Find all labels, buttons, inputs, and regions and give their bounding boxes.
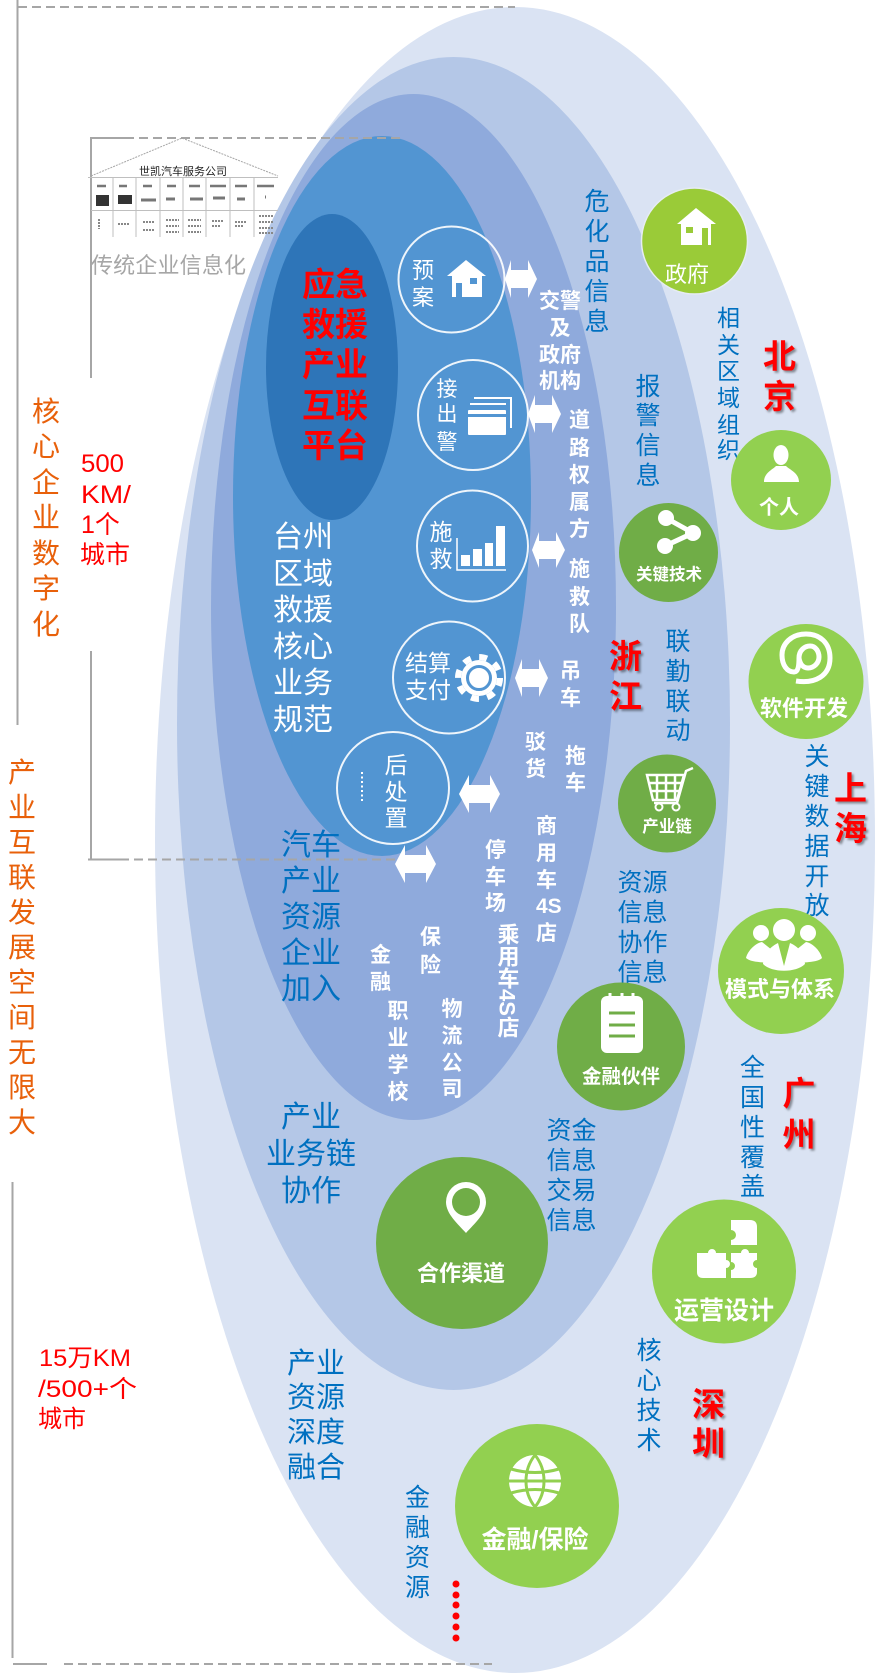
partner labels, white ring text: 方 [569,517,590,541]
badge: software development [748,624,864,739]
side title: industry internet development: 展 [8,932,36,963]
city: Shenzhen: 深 [692,1386,725,1423]
partner labels, white ring text: 乘用车4S店 [494,923,520,1038]
side title: industry internet development: 发 [8,897,36,928]
label: related regional organizations: 域 [717,385,740,411]
process step: after-care: 后 [384,752,408,778]
partner labels, white ring text: 货 [525,757,546,781]
process step: settlement and payment: 支付 [405,677,451,703]
badge: individual [731,430,831,530]
side title: core enterprise digitalization: 核 [32,396,60,427]
partner labels, white ring text: 交警 [539,289,581,313]
label: resource information collaboration: 信息 [617,959,668,987]
partner labels, white ring text: 业 [388,1027,408,1050]
core platform title: 平台 [302,427,368,464]
partner labels, white ring text: 校 [388,1080,408,1104]
partner labels, white ring text: 车 [560,687,581,710]
core platform title: 互联 [302,387,368,424]
label: nationwide coverage: 覆 [740,1144,765,1172]
badge: financial partner: 金融伙伴 [582,1065,660,1088]
label: automotive resource companies join: 资源 [281,901,341,934]
badge: financial partner [557,982,685,1110]
label: core technology: 技 [636,1397,662,1425]
badge: industry chain: 产业链 [642,816,692,836]
badge: operations design: 运营设计 [674,1297,774,1325]
label: resource information collaboration: 协作 [617,929,668,957]
core platform title: 应急 [302,266,368,303]
regional rescue core business specification: 区域 [273,558,333,591]
label: alarm information: 信 [635,432,661,460]
scale note: 500 km one city: 500 [81,450,124,478]
label: hazardous goods information: 信 [584,278,610,306]
badge: operations design [652,1200,796,1344]
scale note: 150000 km 500 cities [38,1345,137,1433]
city: Shanghai: 上 [834,770,867,807]
label: automotive resource companies join: 企业 [281,937,341,970]
process step: rescue: 施 [430,519,452,545]
partner labels, white ring text: 及 [550,317,570,340]
badge: government: 政府 [665,262,709,287]
regional rescue core business specification: 规范 [273,704,333,737]
label: related regional organizations: 织 [717,437,740,463]
badge: government [642,188,748,294]
process step: after-care [337,732,449,844]
label: core technology: 心 [636,1367,662,1395]
process step: rescue [417,490,528,602]
partner labels, white ring text: 拖 [565,745,586,768]
label: resource information collaboration: 资源 [617,869,668,897]
label: deep resource integration: 深度 [287,1416,345,1449]
partner labels, white ring text: 路 [569,437,590,460]
label: fund and transaction information: 资金 [546,1117,597,1145]
side title: core enterprise digitalization: 业 [32,502,60,533]
label: nationwide coverage: 国 [740,1084,765,1112]
bracket lines: outer, core and traditional scope [12,0,515,1664]
regional rescue core business specification: 业务 [273,667,333,700]
side title: core enterprise digitalization: 企 [32,467,60,498]
badge: model and system: 模式与体系 [725,977,835,1002]
label: deep resource integration: 资源 [287,1381,345,1414]
label: related regional organizations: 关 [717,332,740,358]
side title: core enterprise digitalization: 字 [32,573,60,604]
label: open key data: 关 [804,743,830,771]
side title: industry internet development: 无 [8,1037,36,1068]
label: deep resource integration: 融合 [287,1451,345,1484]
label: automotive resource companies join: 汽车 [281,829,341,862]
side title: industry internet development: 间 [8,1002,36,1033]
partner labels, white ring text: 融 [370,971,391,994]
label: financial resources: 融 [405,1514,430,1542]
process step: receive call: 出 [436,403,458,426]
label: open key data: 开 [804,863,830,891]
process step: receive call: 接 [436,378,458,401]
partner labels, white ring text: 车 [536,869,557,892]
partner labels, white ring text: 车 [565,772,586,795]
partner labels, white ring text: 店 [536,922,557,945]
side title: industry internet development: 业 [8,792,36,823]
label: open key data: 数 [804,803,830,831]
partner labels, white ring text: 机构 [539,370,581,393]
label: open key data: 放 [804,892,830,920]
label: hazardous goods information: 化 [584,218,610,246]
process step: rescue: 救 [430,546,452,572]
side title: industry internet development: 联 [8,862,36,893]
side title: industry internet development: 互 [8,827,36,858]
mini org chart: traditional enterprise [88,138,278,237]
partner labels, white ring text: 司 [442,1078,462,1101]
label: related regional organizations: 相 [717,305,740,331]
city: Shanghai: 海 [834,810,867,847]
partner labels, white ring text: 吊 [560,660,581,683]
label: related regional organizations: 组 [717,412,740,438]
side title: industry internet development: 大 [8,1107,36,1138]
label: linked service: 联 [665,628,691,656]
partner labels, white ring text: 公 [442,1052,462,1075]
partner labels, white ring text: 救 [569,586,590,609]
regional rescue core business specification: 核心 [273,631,333,664]
partner labels, white ring text: 商 [536,815,557,838]
partner labels, white ring text: 道 [569,409,590,432]
partner labels, white ring text: 金 [370,943,391,967]
badge: individual: 个人 [759,496,799,519]
scale note: 500 km one city: 城市 [80,541,130,569]
partner labels, white ring text: 职 [388,1000,408,1023]
scale note: 150000 km 500 cities: 城市 [38,1406,86,1433]
label: alarm information: 息 [635,462,661,490]
process step: settlement and payment [393,622,505,734]
double arrows between layers [395,260,565,883]
partner labels, white ring text: 施 [569,558,590,581]
side title: core enterprise digitalization: 数 [32,538,60,569]
badge: partner channel [376,1157,548,1329]
partner labels, white ring text: 用 [536,842,557,865]
scale note: 150000 km 500 cities: /500+个 [38,1376,137,1403]
process step: plan: 预 [412,258,434,283]
partner labels, white ring text: 属 [569,491,590,514]
badge: model and system [718,908,844,1034]
label: financial resources: 金 [405,1484,430,1512]
label: financial resources: 源 [405,1574,430,1602]
label: nationwide coverage: 全 [740,1054,765,1082]
label: automotive resource companies join: 加入 [281,973,341,1006]
label: nationwide coverage: 性 [740,1114,765,1142]
process step: settlement and payment: 结算 [405,650,451,676]
side title: industry internet development: 空 [8,967,36,998]
label: resource information collaboration: 信息 [617,899,668,927]
label: business chain collaboration: 产业 [281,1101,341,1134]
mini org chart: traditional enterprise: 世凯汽车服务公司 [139,164,227,178]
city: Zhejiang: 江 [609,678,642,715]
label: fund and transaction information: 信息 [546,1207,597,1235]
partner labels, white ring text: 驳 [525,731,546,754]
label: fund and transaction information: 信息 [546,1147,597,1175]
label: automotive resource companies join: 产业 [281,865,341,898]
partner labels, white ring text: 险 [420,953,441,977]
badge: key technology [619,503,718,602]
scale note: 150000 km 500 cities: 15万KM [39,1345,131,1372]
label: financial resources: 资 [405,1544,430,1572]
partner labels, white ring text [370,289,590,1104]
partner labels, white ring text: 场 [485,892,506,915]
regional rescue core business specification: 救援 [273,594,333,627]
side title: industry internet development: 限 [8,1072,36,1103]
regional rescue core business specification: 台州 [273,521,333,554]
side title: core enterprise digitalization: 心 [32,431,60,462]
process step: after-care: 处 [384,779,408,805]
badge: partner channel: 合作渠道 [417,1261,505,1286]
partner labels, white ring text: 权 [569,464,590,487]
process step: plan [398,226,504,332]
label: core technology: 核 [636,1337,662,1365]
partner labels, white ring text: 政府 [539,343,581,367]
badge: finance and insurance: 金融/保险 [482,1526,588,1554]
badge: finance and insurance [455,1424,619,1588]
partner labels, white ring text: 停 [485,839,506,862]
partner labels, white ring text: 学 [388,1053,408,1077]
label: fund and transaction information: 交易 [546,1177,597,1205]
partner labels, white ring text: 物 [442,998,462,1021]
red ellipsis dots [452,1580,460,1642]
label: deep resource integration: 产业 [287,1347,345,1380]
core platform title: 产业 [302,346,368,383]
label: linked service: 联 [665,688,691,716]
label: hazardous goods information: 息 [584,308,610,336]
scale note: 500 km one city: KM/ [81,481,131,509]
label: hazardous goods information: 危 [584,188,610,216]
city: Zhejiang: 浙 [609,638,642,675]
label: core technology: 术 [636,1427,662,1455]
city: Beijing: 北 [763,338,796,375]
badge: industry chain [618,754,716,852]
label: open key data: 键 [804,773,830,801]
partner labels, white ring text: 流 [442,1025,462,1048]
city: Guangzhou: 州 [782,1116,816,1153]
label: linked service: 勤 [665,658,691,686]
side title: industry internet development: 产 [8,757,36,788]
process step: receive call: 警 [436,431,458,454]
city: Guangzhou: 广 [782,1075,816,1112]
process step: receive call [418,360,528,470]
partner labels, white ring text: 保 [420,926,441,949]
label: nationwide coverage: 盖 [740,1173,765,1201]
label: linked service: 动 [665,717,691,745]
label: hazardous goods information: 品 [584,248,610,276]
label: alarm information: 报 [635,373,661,401]
partner labels, white ring text: 队 [569,613,590,636]
core platform title: 救援 [302,306,368,343]
partner labels, white ring text: 4S [536,895,562,918]
label: alarm information: 警 [635,402,661,430]
label: business chain collaboration: 业务链 [266,1138,356,1171]
badge: software development: 软件开发 [760,696,848,721]
process step: plan: 案 [412,285,434,310]
city: Beijing: 京 [763,378,796,415]
process step: after-care: 置 [384,805,408,831]
side title: core enterprise digitalization: 化 [32,609,60,640]
caption: traditional enterprise informatization: 传统企业信息化 [91,253,246,278]
partner labels, white ring text: 车 [485,866,506,889]
label: business chain collaboration: 协作 [281,1175,341,1208]
badge: key technology: 关键技术 [636,565,702,584]
label: related regional organizations: 区 [717,358,740,384]
label: open key data: 据 [804,833,830,861]
scale note: 500 km one city: 1个 [81,511,120,539]
city: Shenzhen: 圳 [692,1425,725,1462]
scale note: 500 km one city [80,450,131,569]
